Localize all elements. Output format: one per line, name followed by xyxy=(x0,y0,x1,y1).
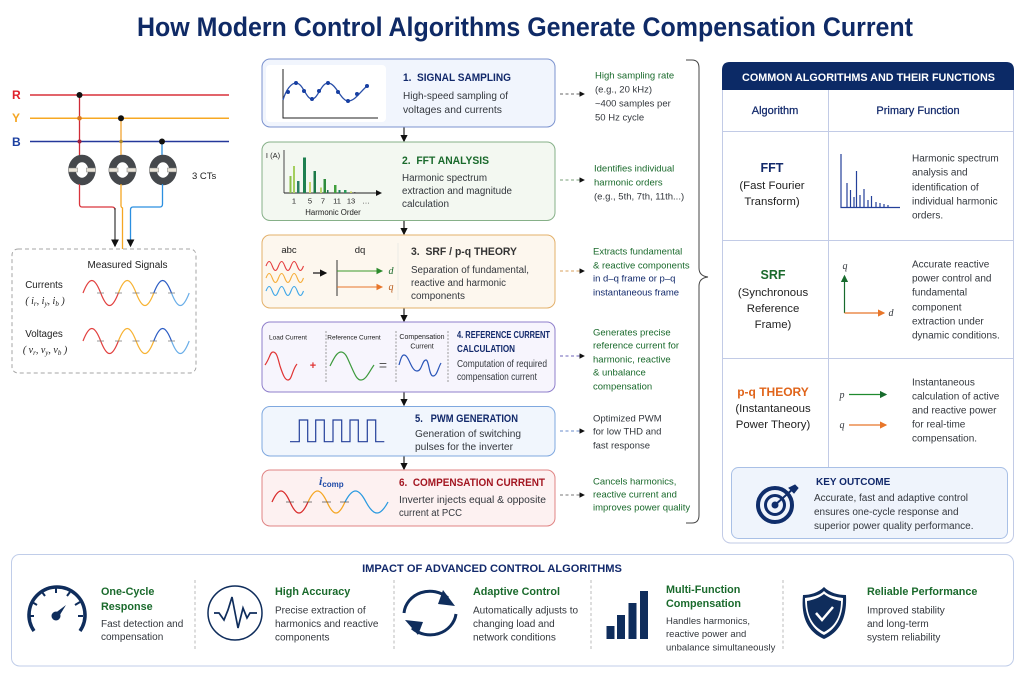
note: reference current: harmonic, reactive xyxy=(593,354,671,366)
panel: step 5 PWM generation: Generation of switching xyxy=(415,429,521,440)
panel: common algorithms table: Primary Function xyxy=(876,105,960,117)
panel: step 2 FFT analysis xyxy=(262,142,555,220)
note: PWM: fast response xyxy=(593,440,650,452)
icon: p and q arrows xyxy=(838,390,886,431)
callout: key outcome: superior power quality performance. xyxy=(814,521,974,532)
flow connector arrows xyxy=(403,127,405,469)
note: SRF: instantaneous frame xyxy=(593,288,679,298)
panel: impact of advanced control algorithms xyxy=(12,554,1014,666)
measured signals box: b xyxy=(55,300,59,308)
note: sampling: High sampling rate xyxy=(595,70,674,82)
current equation diagram xyxy=(265,331,448,382)
note: reference current: & unbalance xyxy=(593,368,646,378)
item: one-cycle response: Response xyxy=(101,601,153,613)
note: reference current: reference current for xyxy=(593,340,679,352)
current equation diagram: = xyxy=(379,357,387,373)
current equation diagram: + xyxy=(310,360,316,372)
dashed arrows to notes xyxy=(560,94,584,495)
panel: common algorithms table xyxy=(722,62,1014,543)
panel: step 3 SRF / p-q theory: Separation of fundamental, xyxy=(411,265,529,276)
item: one-cycle response: Fast detection and xyxy=(101,619,183,630)
title: How Modern Control Algorithms Generate Compensation Current xyxy=(137,12,913,42)
measured signals box: Measured Signals xyxy=(87,260,168,271)
row: FFT: identification of xyxy=(912,182,979,194)
note: SRF: & reactive components xyxy=(593,260,690,272)
item: high accuracy: components xyxy=(275,632,329,644)
row: p-q theory: for real-time xyxy=(912,420,966,430)
item: adaptive control: changing load and xyxy=(473,619,555,630)
measured signals box: y xyxy=(44,349,49,357)
three-phase lines: R xyxy=(12,88,21,102)
panel: step 4 reference current calculation: Computation of required xyxy=(457,359,547,370)
harmonic spectrum chart: 13 xyxy=(347,196,355,206)
row: SRF: extraction under xyxy=(912,316,984,328)
panel: step 5 PWM generation: 5. PWM GENERATION xyxy=(415,413,518,425)
item: high accuracy: High Accuracy xyxy=(275,586,350,598)
measured signals box: , i xyxy=(48,296,56,307)
measured signals box: Voltages xyxy=(25,329,63,340)
table header xyxy=(722,62,1014,90)
row: FFT: Transform) xyxy=(744,196,800,208)
row: p-q theory: calculation of active xyxy=(912,392,1000,402)
note: sampling: 50 Hz cycle xyxy=(595,112,644,124)
sampled signal chart xyxy=(283,69,378,118)
panel: step 6 compensation current: 6. COMPENSATION CURRENT xyxy=(399,477,545,489)
item: adaptive control: Adaptive Control xyxy=(473,586,560,598)
panel: step 3 SRF / p-q theory xyxy=(262,235,555,308)
row: FFT: orders. xyxy=(912,210,943,222)
harmonic spectrum chart: Harmonic Order xyxy=(305,208,361,217)
row: p-q theory: p-q THEORY xyxy=(737,385,809,399)
row: SRF: Frame) xyxy=(755,319,792,331)
panel: three-phase input and CTs xyxy=(12,88,229,373)
row: FFT: FFT xyxy=(761,161,784,175)
callout: key outcome: KEY OUTCOME xyxy=(816,477,891,488)
panel: step 2 FFT analysis: extraction and magnitude xyxy=(402,186,512,197)
i comp waveform: comp xyxy=(322,480,344,489)
note: reference current: Generates precise xyxy=(593,328,671,338)
row: p-q theory: compensation. xyxy=(912,434,977,444)
note: sampling xyxy=(595,70,674,124)
panel: step 3 SRF / p-q theory: reactive and harmonic xyxy=(411,278,506,289)
panel: step 2 FFT analysis: calculation xyxy=(402,199,449,210)
callout: key outcome: ensures one-cycle response and xyxy=(814,507,959,518)
item: adaptive control: network conditions xyxy=(473,632,556,644)
three-phase lines: B xyxy=(12,135,21,149)
row: SRF: (Synchronous xyxy=(738,287,808,299)
note: sampling: ~400 samples per xyxy=(595,98,671,110)
row: p-q theory xyxy=(735,378,1000,444)
item: reliable performance: Reliable Performance xyxy=(867,586,977,598)
measured signals box: r xyxy=(34,300,37,308)
CT signal wires xyxy=(80,184,162,249)
note: FFT xyxy=(594,164,684,202)
panel: step 4 reference current calculation: compensation current xyxy=(457,372,537,383)
row: SRF: fundamental xyxy=(912,288,967,298)
icon: bars xyxy=(606,591,648,639)
harmonic spectrum chart: 11 xyxy=(333,196,341,206)
measured signals box: ) xyxy=(59,296,65,307)
measured signals box: r xyxy=(33,349,36,357)
three-phase lines: Y xyxy=(12,111,20,125)
abc to dq diagram: d xyxy=(388,266,394,277)
measured signals box: y xyxy=(43,300,48,308)
item: adaptive control xyxy=(404,586,578,644)
item: multi-function compensation: reactive power and xyxy=(666,629,746,640)
current equation diagram: Reference Current xyxy=(327,334,381,342)
abc to dq diagram: abc xyxy=(281,245,297,256)
row: p-q theory: Instantaneous xyxy=(912,378,975,388)
i comp waveform: i xyxy=(319,474,322,488)
item: reliable performance xyxy=(803,586,977,644)
harmonic spectrum chart: I (A) xyxy=(266,151,281,160)
heading: IMPACT OF ADVANCED CONTROL ALGORITHMS xyxy=(362,563,622,575)
panel: step 6 compensation current: current at PCC xyxy=(399,508,462,519)
panel: step 4 reference current calculation xyxy=(262,322,555,392)
icon: cycle arrows xyxy=(404,590,456,635)
note: reference current xyxy=(593,328,679,392)
measured signals box: , v xyxy=(36,345,46,356)
note: reference current: compensation xyxy=(593,382,652,392)
item: high accuracy xyxy=(208,586,379,644)
current transformers xyxy=(68,158,217,182)
harmonic spectrum chart xyxy=(266,150,381,217)
measured signals box: ( v xyxy=(23,345,33,356)
note: FFT: harmonic orders xyxy=(594,178,663,188)
measured signals box: ) xyxy=(61,345,68,356)
measured signals box: , i xyxy=(37,296,45,307)
panel: common algorithms table: Algorithm xyxy=(752,105,798,117)
brace xyxy=(686,60,708,523)
panel: step 4 reference current calculation: CALCULATION xyxy=(457,343,515,355)
note: compensation: Cancels harmonics, xyxy=(593,476,676,488)
icon: p and q arrows: p xyxy=(838,390,844,401)
icon: gauge xyxy=(29,587,85,631)
table header: COMMON ALGORITHMS AND THEIR FUNCTIONS xyxy=(742,72,995,84)
icon: target xyxy=(758,485,798,522)
callout: key outcome: Accurate, fast and adaptive control xyxy=(814,493,968,504)
item: high accuracy: harmonics and reactive xyxy=(275,619,379,630)
panel: step 6 compensation current: Inverter injects equal & opposite xyxy=(399,495,546,506)
icon: d-q axes xyxy=(842,261,894,319)
note: PWM: for low THD and xyxy=(593,426,661,438)
note: compensation: reactive current and xyxy=(593,490,677,500)
note: PWM xyxy=(593,414,662,452)
abc to dq diagram xyxy=(266,245,394,296)
panel: step 1 signal sampling: 1. SIGNAL SAMPLING xyxy=(403,72,511,84)
item: one-cycle response: One-Cycle xyxy=(101,586,154,598)
harmonic spectrum chart: 1 xyxy=(292,196,296,206)
note: FFT: (e.g., 5th, 7th, 11th...) xyxy=(594,192,684,202)
icon: d-q axes: d xyxy=(888,308,894,319)
measured signals box: , v xyxy=(48,345,58,356)
panel: step 1 signal sampling xyxy=(262,59,555,127)
current equation diagram: Current xyxy=(410,344,434,350)
panel: step 5 PWM generation: pulses for the inverter xyxy=(415,442,514,453)
row: p-q theory: and reactive power xyxy=(912,406,997,416)
item: multi-function compensation: Handles harmonics, xyxy=(666,616,750,627)
icon: shield xyxy=(803,587,846,639)
row: FFT: Harmonic spectrum xyxy=(912,154,999,164)
measured signals box xyxy=(12,249,196,373)
i comp waveform xyxy=(272,474,388,513)
icon: p and q arrows: q xyxy=(840,420,844,431)
current equation diagram: Load Current xyxy=(269,334,307,342)
panel: step 5 PWM generation xyxy=(262,406,555,456)
row: SRF: component xyxy=(912,302,962,314)
panel: step 3 SRF / p-q theory: 3. SRF / p-q THEORY xyxy=(411,246,518,258)
item: one-cycle response xyxy=(29,586,183,643)
row: SRF: Accurate reactive xyxy=(912,260,990,270)
panel: step 1 signal sampling: High-speed sampling of xyxy=(403,91,508,102)
current equation diagram: Compensation xyxy=(399,334,445,341)
harmonic spectrum chart: 5 xyxy=(308,196,312,206)
note: compensation xyxy=(593,476,690,514)
row: p-q theory: (Instantaneous xyxy=(735,403,811,415)
row: SRF: Reference xyxy=(747,303,799,315)
abc to dq diagram: q xyxy=(388,282,394,293)
item: multi-function compensation: Multi-Function xyxy=(666,584,740,596)
note: compensation: improves power quality xyxy=(593,502,690,514)
current transformers: 3 CTs xyxy=(192,171,217,182)
measured signals box: Currents xyxy=(25,280,63,291)
item: reliable performance: and long-term xyxy=(867,619,929,630)
row: FFT: individual harmonic xyxy=(912,196,998,208)
row: SRF: power control and xyxy=(912,274,992,284)
three-phase lines xyxy=(12,88,229,155)
row: FFT: (Fast Fourier xyxy=(739,180,805,192)
note: SRF xyxy=(593,246,690,298)
row: SRF: SRF xyxy=(760,268,786,282)
item: multi-function compensation: unbalance simultaneously xyxy=(666,642,776,654)
row: SRF: dynamic conditions. xyxy=(912,330,1000,342)
icon: d-q axes: q xyxy=(842,261,848,272)
harmonic spectrum chart: 7 xyxy=(321,196,325,206)
item: one-cycle response: compensation xyxy=(101,632,163,643)
measured signals box: ( i xyxy=(25,296,34,307)
row: p-q theory: Power Theory) xyxy=(736,419,810,431)
item: reliable performance: Improved stability xyxy=(867,606,945,616)
note: FFT: Identifies individual xyxy=(594,164,674,174)
panel: step 4 reference current calculation: 4. REFERENCE CURRENT xyxy=(457,329,550,341)
row: SRF xyxy=(738,260,1000,342)
note: SRF: Extracts fundamental xyxy=(593,246,682,258)
item: high accuracy: Precise extraction of xyxy=(275,606,366,616)
PWM pulse train xyxy=(290,420,384,442)
panel: step 6 compensation current xyxy=(262,470,555,526)
note: sampling: (e.g., 20 kHz) xyxy=(595,84,652,96)
item: adaptive control: Automatically adjusts to xyxy=(473,606,578,616)
callout: key outcome xyxy=(732,468,1008,538)
panel: step 3 SRF / p-q theory: components xyxy=(411,291,465,302)
item: multi-function compensation: Compensation xyxy=(666,598,741,610)
note: SRF: in d–q frame or p–q xyxy=(593,274,675,284)
item: reliable performance: system reliability xyxy=(867,632,940,644)
measured signals box: b xyxy=(58,349,62,357)
item: multi-function compensation xyxy=(606,584,776,654)
current waveform xyxy=(83,280,189,306)
panel: step 1 signal sampling: voltages and currents xyxy=(403,105,502,116)
voltage waveform xyxy=(83,328,189,354)
row: FFT: analysis and xyxy=(912,168,968,178)
abc to dq diagram: dq xyxy=(355,245,365,256)
icon: waveform circle xyxy=(208,586,262,640)
panel: step 2 FFT analysis: Harmonic spectrum xyxy=(402,173,487,184)
row: FFT xyxy=(739,154,999,222)
icon: mini spectrum xyxy=(841,154,900,208)
panel: step 2 FFT analysis: 2. FFT ANALYSIS xyxy=(402,155,489,167)
note: PWM: Optimized PWM xyxy=(593,414,662,424)
notes column xyxy=(593,70,690,514)
harmonic spectrum chart: … xyxy=(362,196,370,206)
